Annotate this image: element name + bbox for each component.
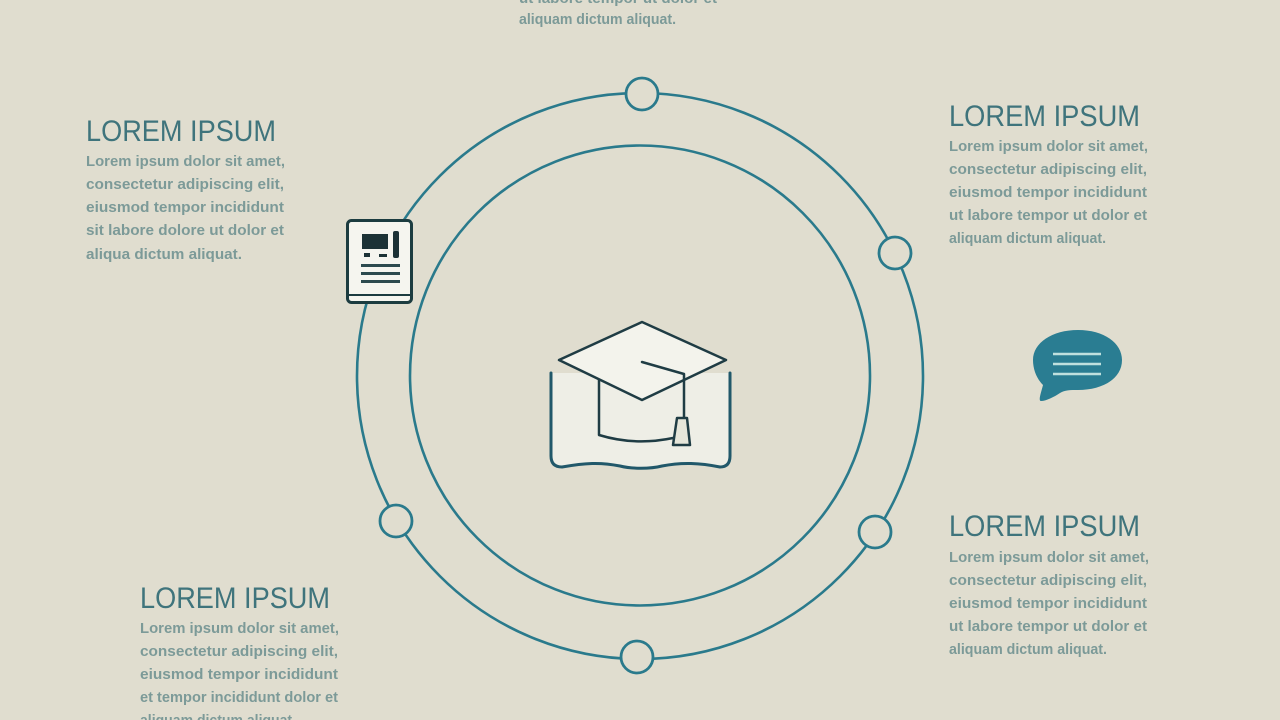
text block: bottom right <box>949 510 1149 658</box>
text block: top right: aliquam dictum aliquat. <box>949 231 1106 247</box>
outer ring <box>357 93 923 659</box>
text block: bottom right: ut labore tempor ut dolor et <box>949 619 1147 635</box>
text block: bottom right: eiusmod tempor incididunt <box>949 596 1147 612</box>
icon: speech bubble <box>1033 330 1122 401</box>
text block: top left <box>86 115 285 263</box>
heading: top left: LOREM IPSUM <box>86 115 276 148</box>
text block: top left: Lorem ipsum dolor sit amet, <box>86 154 285 170</box>
text block: top left: sit labore dolore ut dolor et <box>86 223 284 239</box>
text block: top: aliquam dictum aliquat. <box>519 12 676 28</box>
text block: top right: consectetur adipiscing elit, <box>949 162 1147 178</box>
heading: bottom left: LOREM IPSUM <box>140 582 330 615</box>
text block: bottom left: eiusmod tempor incididunt <box>140 667 338 683</box>
icon: book with document page <box>348 220 412 302</box>
text block: bottom left <box>140 582 339 720</box>
text block: top right: eiusmod tempor incididunt <box>949 185 1147 201</box>
text block: top <box>519 0 717 28</box>
text block: top left: eiusmod tempor incididunt <box>86 200 284 216</box>
ring nodes <box>380 78 911 673</box>
text block: top right <box>949 100 1148 247</box>
heading: top right: LOREM IPSUM <box>949 100 1140 133</box>
text block: top left: aliqua dictum aliquat. <box>86 247 242 263</box>
icon: graduation cap on open book <box>551 322 730 468</box>
text block: bottom left: Lorem ipsum dolor sit amet, <box>140 621 339 637</box>
text block: top left: consectetur adipiscing elit, <box>86 177 284 193</box>
heading: bottom right: LOREM IPSUM <box>949 510 1140 543</box>
text block: top right: Lorem ipsum dolor sit amet, <box>949 139 1148 155</box>
text block: bottom left: et tempor incididunt dolor et <box>140 690 338 706</box>
inner ring <box>410 146 870 606</box>
text block: bottom right: consectetur adipiscing elit, <box>949 573 1147 589</box>
text block: top right: ut labore tempor ut dolor et <box>949 208 1147 224</box>
text block: bottom right: aliquam dictum aliquat. <box>949 642 1107 658</box>
text block: bottom right: Lorem ipsum dolor sit amet, <box>949 550 1149 566</box>
text block: bottom left: consectetur adipiscing elit, <box>140 644 338 660</box>
